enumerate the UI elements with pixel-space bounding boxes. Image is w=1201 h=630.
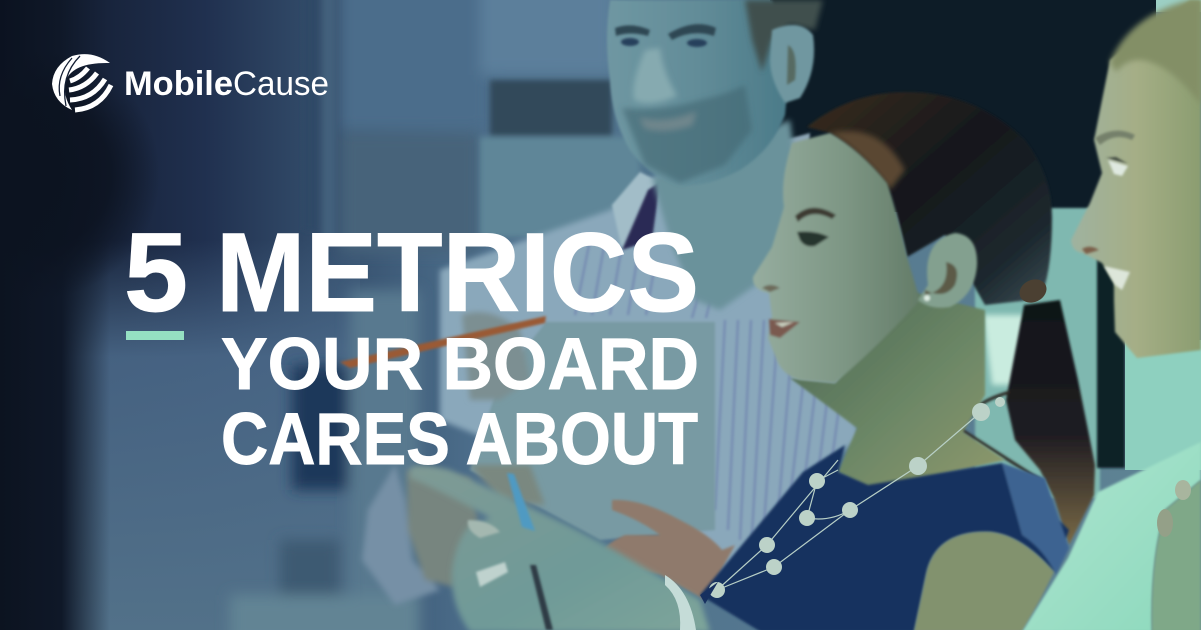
icon: globe — [52, 54, 111, 110]
right woman: head and hair — [1071, 0, 1201, 358]
man: blurred sleeve and hands — [340, 312, 735, 605]
man: neck — [652, 120, 800, 310]
right woman: shoulder beads — [1157, 480, 1191, 537]
mint accent bar — [126, 331, 184, 340]
background: bright window and dark frame — [975, 0, 1201, 498]
man: striped shirt — [440, 133, 860, 590]
middle woman: face — [753, 133, 920, 383]
title — [124, 210, 699, 480]
title: METRICS: METRICS — [216, 210, 699, 335]
logo: MobileCause — [52, 54, 329, 110]
middle woman: ponytail — [962, 300, 1095, 545]
middle woman: hair — [807, 92, 1052, 305]
background: dark wall — [770, 0, 1156, 212]
title: number 5: 5 — [124, 210, 188, 335]
middle woman: ear and earring — [918, 233, 977, 308]
middle woman: hand, pen and bracelet — [410, 465, 718, 630]
middle woman: arm — [914, 532, 1054, 630]
logo wordmark: MobileCause — [124, 65, 329, 103]
middle woman: pearl necklace — [709, 397, 1005, 598]
right woman: arm and shoulder skin — [1152, 480, 1201, 630]
middle woman: navy dress — [700, 445, 1069, 630]
middle woman: hair tie — [1016, 275, 1050, 307]
middle woman: hair highlights — [830, 131, 905, 190]
right woman: blouse — [1022, 442, 1201, 630]
man: head — [607, 0, 823, 185]
notebook — [470, 322, 715, 540]
middle woman: neck and shoulder — [790, 290, 1005, 490]
title: YOUR BOARD: YOUR BOARD — [221, 324, 699, 405]
title: CARES ABOUT: CARES ABOUT — [221, 399, 698, 480]
